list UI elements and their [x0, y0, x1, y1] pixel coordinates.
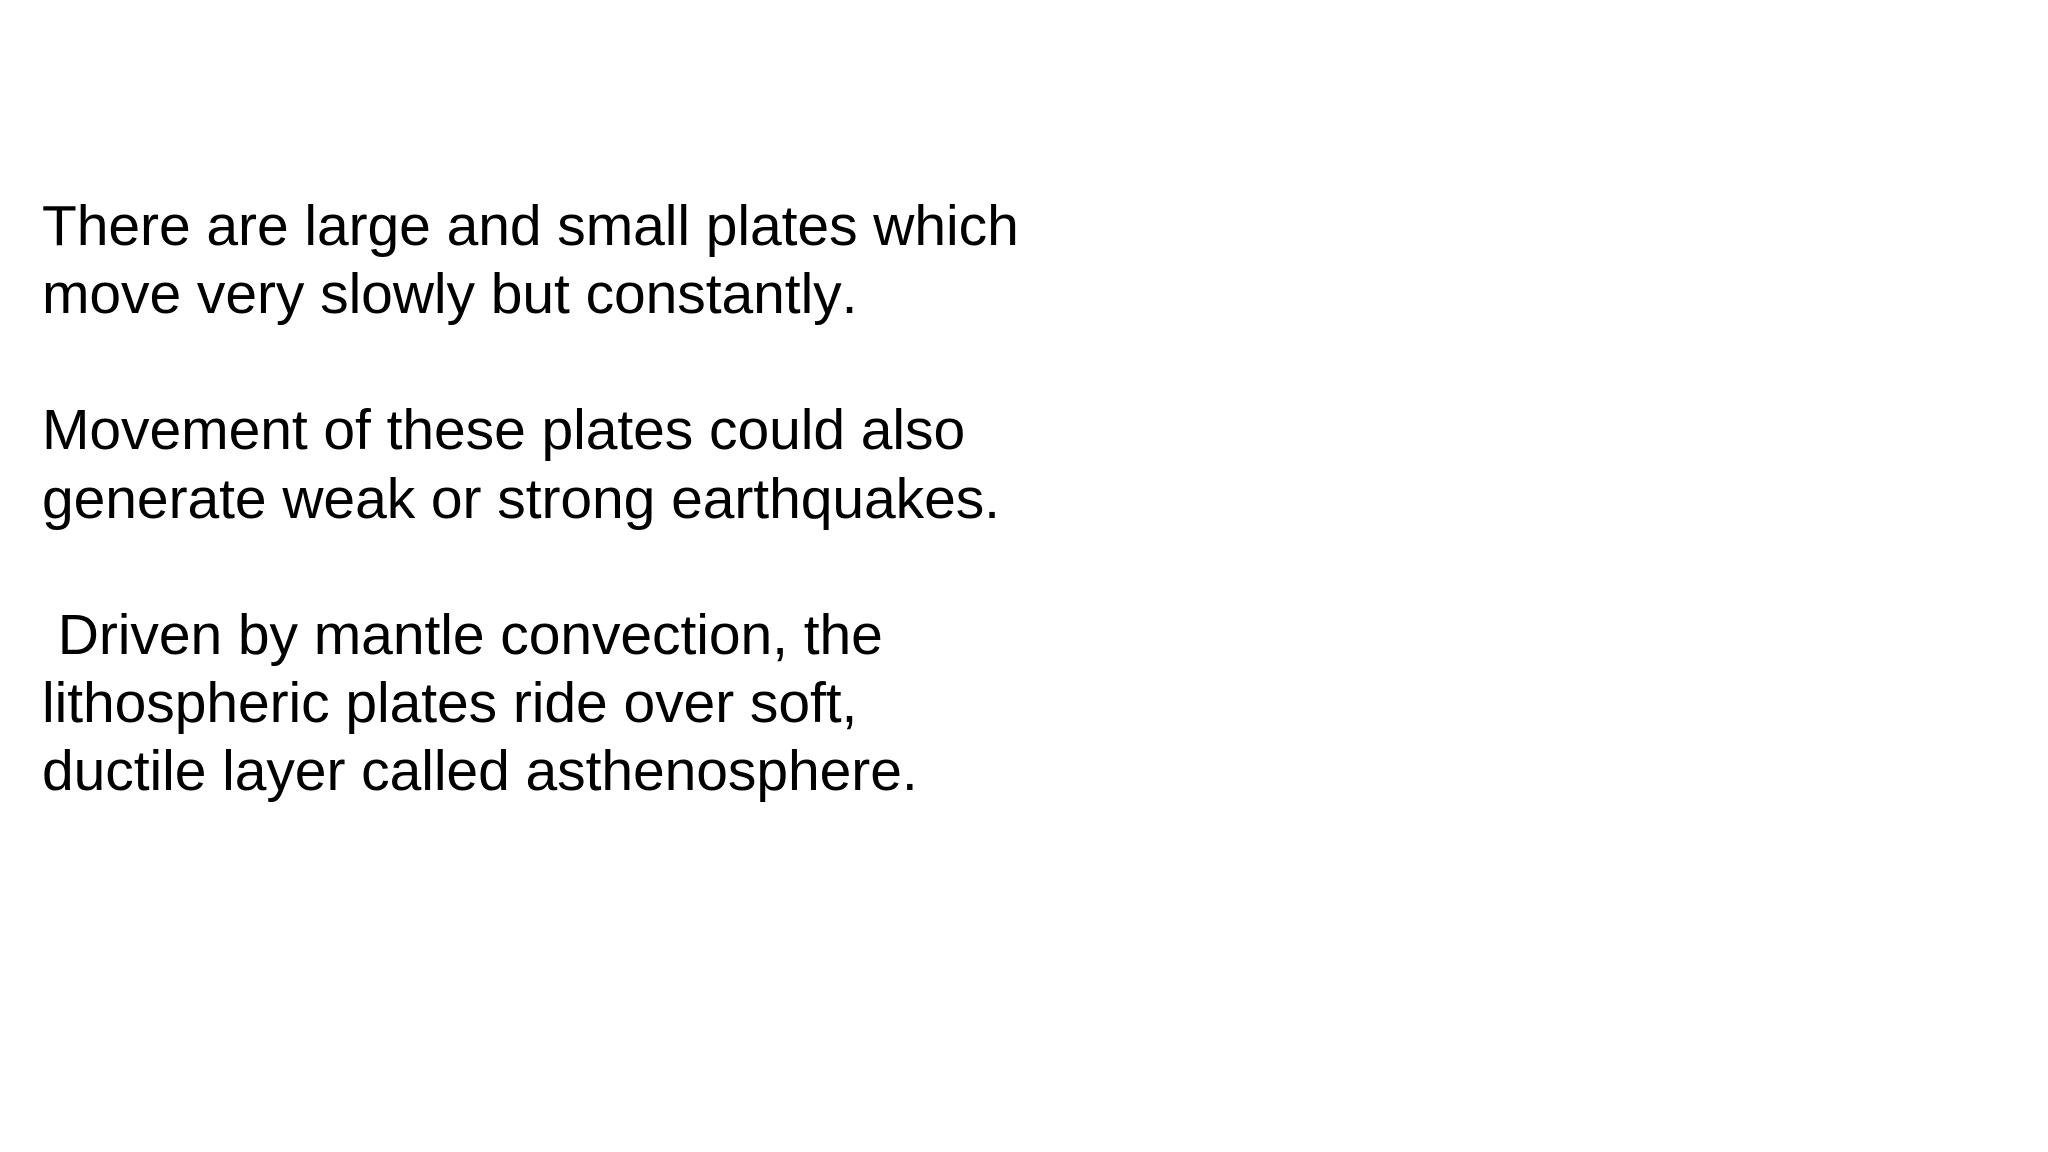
text block: plate tectonics explanation: There are large and small plates which [42, 194, 1019, 258]
text block: plate tectonics explanation: Movement of these plates could also [42, 398, 965, 462]
text block: plate tectonics explanation: lithospheric plates ride over soft, [42, 671, 857, 735]
text block: plate tectonics explanation: generate weak or strong earthquakes. [42, 467, 1000, 531]
text block: plate tectonics explanation [42, 194, 1019, 803]
text block: plate tectonics explanation: ductile layer called asthenosphere. [42, 739, 918, 803]
text block: plate tectonics explanation: move very slowly but constantly. [42, 262, 857, 326]
text block: plate tectonics explanation: Driven by mantle convection, the [58, 603, 883, 667]
